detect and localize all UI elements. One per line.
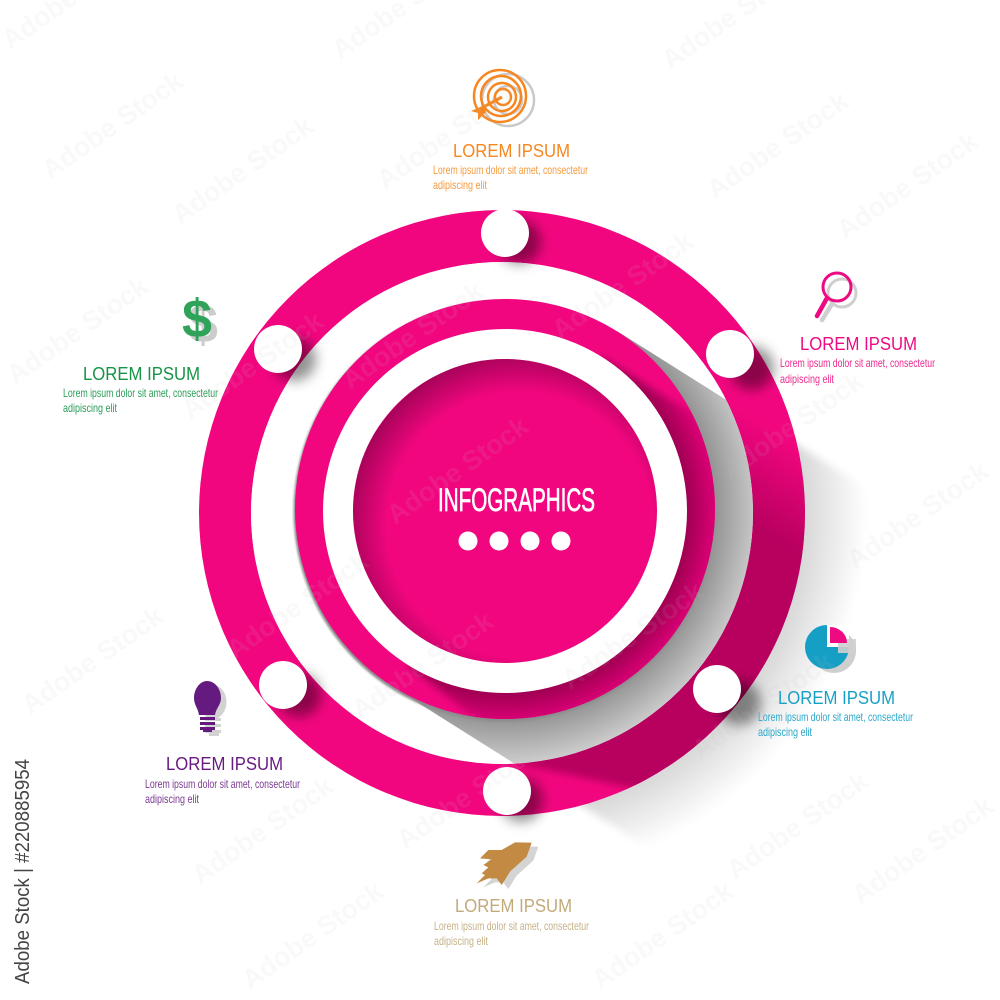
ring shading from long shadow (516, 420, 805, 790)
white gap (251, 262, 753, 764)
watermark: Adobe Stock (546, 225, 699, 345)
text: blue (758, 710, 913, 739)
text: orange: adipiscing elit (433, 178, 487, 192)
white ring (323, 329, 687, 693)
centre pink disc (353, 359, 657, 663)
text: green: adipiscing elit (63, 401, 117, 415)
centre title: INFOGRAPHICS (438, 482, 595, 518)
text: purple (145, 777, 300, 806)
watermark: Adobe Stock (176, 305, 329, 425)
text: orange: Lorem ipsum dolor sit amet, consectetur (433, 163, 588, 177)
watermark: Adobe Stock (831, 125, 984, 245)
text: blue: Lorem ipsum dolor sit amet, consectetur (758, 710, 913, 724)
heading: tan: LOREM IPSUM (455, 895, 572, 916)
watermark: Adobe Stock (186, 770, 339, 890)
watermark: Adobe Stock (16, 600, 169, 720)
text: pink (780, 356, 935, 386)
heading: orange: LOREM IPSUM (453, 140, 570, 161)
centre disc inner shadow (353, 359, 657, 663)
watermark: Adobe Stock (686, 645, 839, 765)
icon: target (471, 70, 534, 126)
node shadows (272, 220, 774, 822)
heading: green: LOREM IPSUM (83, 363, 200, 384)
watermark: Adobe Stock (586, 875, 739, 995)
text: purple: adipiscing elit (145, 792, 199, 806)
watermark: Adobe Stock (721, 765, 874, 885)
watermark: Adobe Stock (371, 75, 524, 195)
icon: dollar: $ (188, 294, 218, 354)
text: green: Lorem ipsum dolor sit amet, consectetur (63, 386, 218, 400)
inner disc shading (405, 354, 715, 719)
gap long shadow (292, 302, 753, 764)
heading: blue: LOREM IPSUM (778, 687, 895, 708)
inner pink disc (295, 299, 715, 719)
text: blue: adipiscing elit (758, 725, 812, 739)
icon: magnifier (817, 273, 856, 320)
watermark: Adobe Stock (556, 575, 709, 695)
text: orange (433, 163, 588, 192)
text: tan: Lorem ipsum dolor sit amet, consectetur (434, 919, 589, 933)
icon: dollar: $ (182, 289, 212, 349)
icon: pie chart (805, 625, 856, 673)
text: pink: Lorem ipsum dolor sit amet, consectetur (780, 356, 935, 370)
watermark: Adobe Stock (36, 65, 189, 185)
watermark: Adobe Stock (236, 875, 389, 995)
watermark: Adobe Stock (166, 110, 319, 230)
icon: rocket (477, 842, 538, 889)
watermark: Adobe Stock (716, 365, 869, 485)
watermark: Adobe Stock (221, 545, 374, 665)
heading: pink: LOREM IPSUM (800, 333, 917, 354)
icon: light bulb (194, 681, 226, 736)
watermark: Adobe Stock (1, 270, 154, 390)
text: pink: adipiscing elit (780, 372, 834, 386)
text: purple: Lorem ipsum dolor sit amet, consectetur (145, 777, 300, 791)
watermark: Adobe Stock (846, 790, 999, 910)
watermark: Adobe Stock (841, 455, 994, 575)
outer cast shadow (393, 331, 955, 900)
text: green (63, 386, 218, 415)
heading: purple: LOREM IPSUM (166, 753, 283, 774)
text: tan (434, 919, 589, 948)
stock id label: Adobe Stock | #220885954 (12, 759, 34, 984)
centre dots (458, 532, 570, 550)
watermark: Adobe Stock (391, 735, 544, 855)
watermark: Adobe Stock (346, 605, 499, 725)
watermark: Adobe Stock (701, 85, 854, 205)
node circles (254, 209, 754, 815)
watermark: Adobe Stock (381, 410, 534, 530)
text: tan: adipiscing elit (434, 934, 488, 948)
watermark: Adobe Stock (336, 275, 489, 395)
outer pink ring (199, 210, 805, 816)
